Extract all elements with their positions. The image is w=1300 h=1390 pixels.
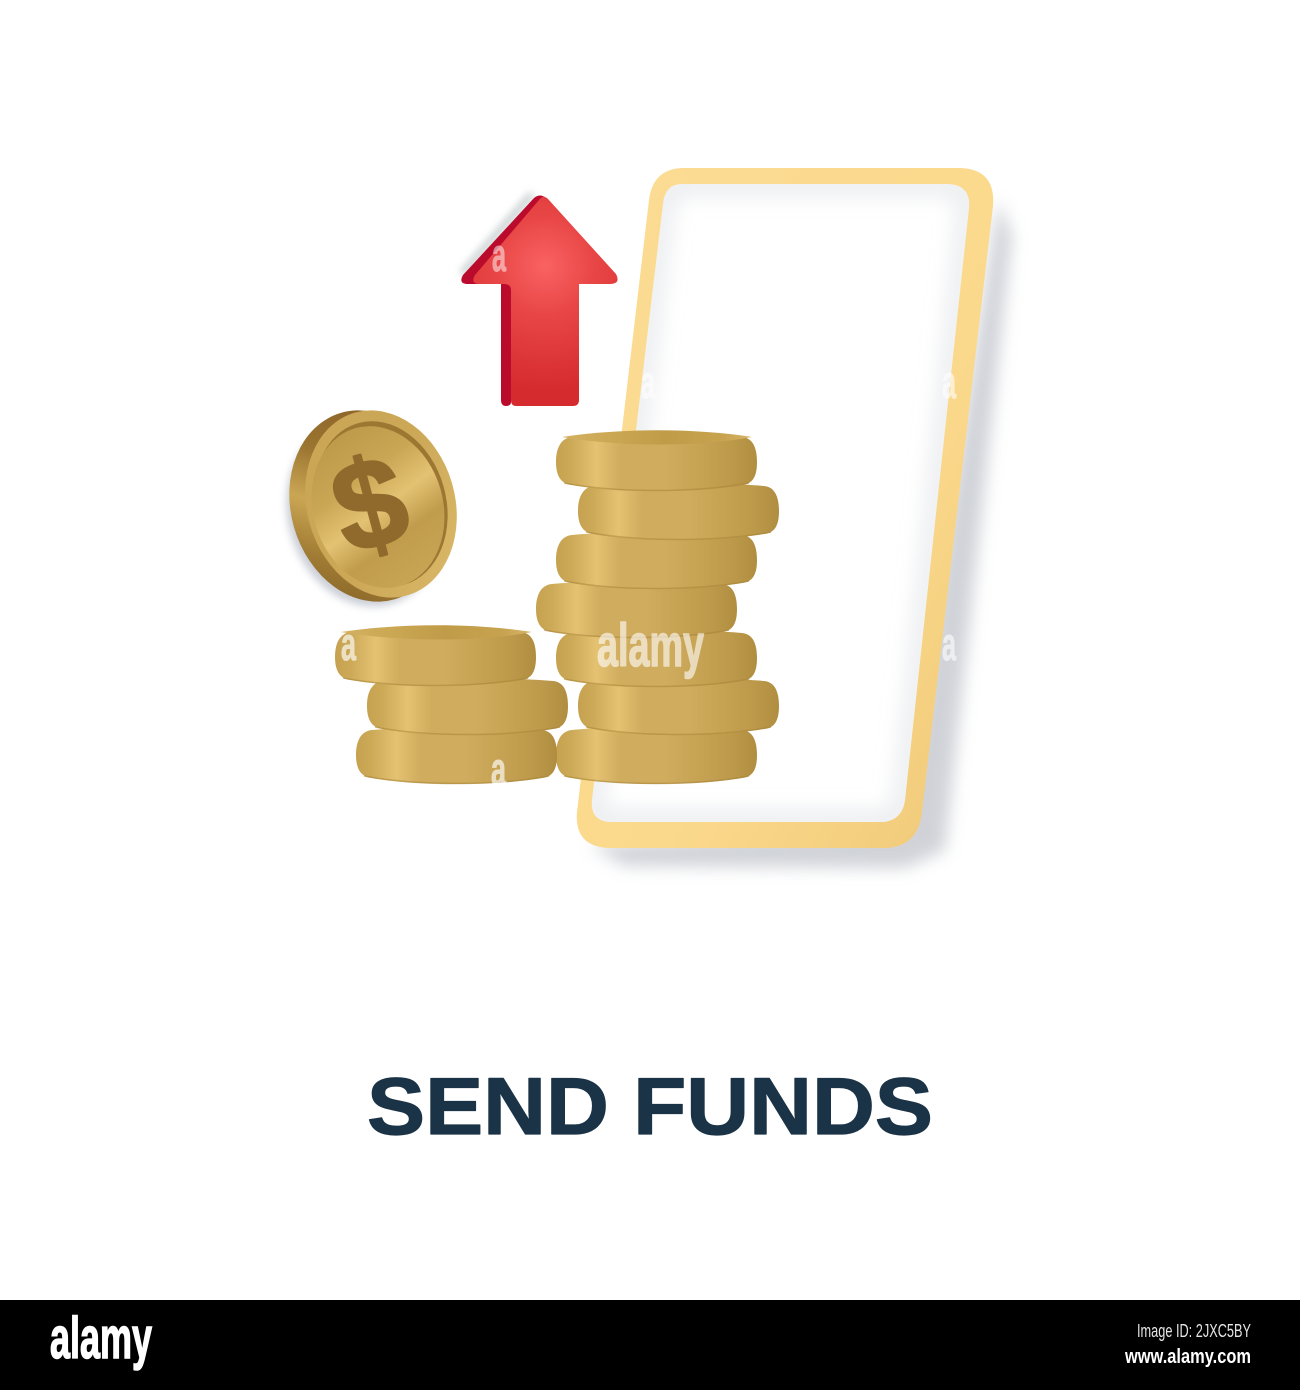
- image id: Image ID: 2JXC5BY: [1137, 1321, 1251, 1341]
- title: SEND FUNDS: [367, 1062, 933, 1152]
- tall coin stack: [536, 430, 779, 784]
- watermark a: a: [492, 229, 506, 281]
- coin shadow: [264, 402, 464, 626]
- dollar sign: $: [318, 427, 422, 581]
- coin 1: [556, 430, 757, 491]
- coin face: [293, 410, 463, 604]
- arrow up: [461, 194, 618, 406]
- watermark: [341, 229, 956, 795]
- floating dollar coin: [264, 392, 478, 626]
- coin 2: [578, 483, 779, 540]
- coin 1: [335, 625, 536, 686]
- watermark a: a: [341, 618, 356, 670]
- watermark a: a: [641, 356, 655, 408]
- coin inner recess: [295, 405, 467, 603]
- footer bar: [0, 1300, 1300, 1390]
- watermark center: alamy: [597, 612, 704, 679]
- watermark a: a: [942, 356, 956, 408]
- coin 4: [536, 581, 737, 638]
- website: www.alamy.com: [1124, 1346, 1251, 1368]
- arrow side: [461, 196, 560, 406]
- short coin stack: [335, 625, 568, 784]
- arrow face: [473, 197, 618, 406]
- footer logo: alamy: [50, 1306, 152, 1371]
- phone screen: [580, 180, 980, 830]
- coin 6: [578, 678, 779, 735]
- coin edge: [267, 392, 469, 620]
- watermark a: a: [491, 743, 506, 795]
- coin 3: [356, 727, 557, 784]
- phone shadow: [590, 200, 1012, 868]
- coin 2: [367, 678, 568, 735]
- arrow shadow: [462, 194, 532, 274]
- coin front: [284, 392, 478, 616]
- phone: [577, 168, 1012, 868]
- watermark a: a: [942, 618, 956, 670]
- phone frame: [577, 168, 993, 848]
- coin 5: [556, 630, 757, 687]
- coin 7: [556, 727, 757, 784]
- coin 3: [556, 532, 757, 589]
